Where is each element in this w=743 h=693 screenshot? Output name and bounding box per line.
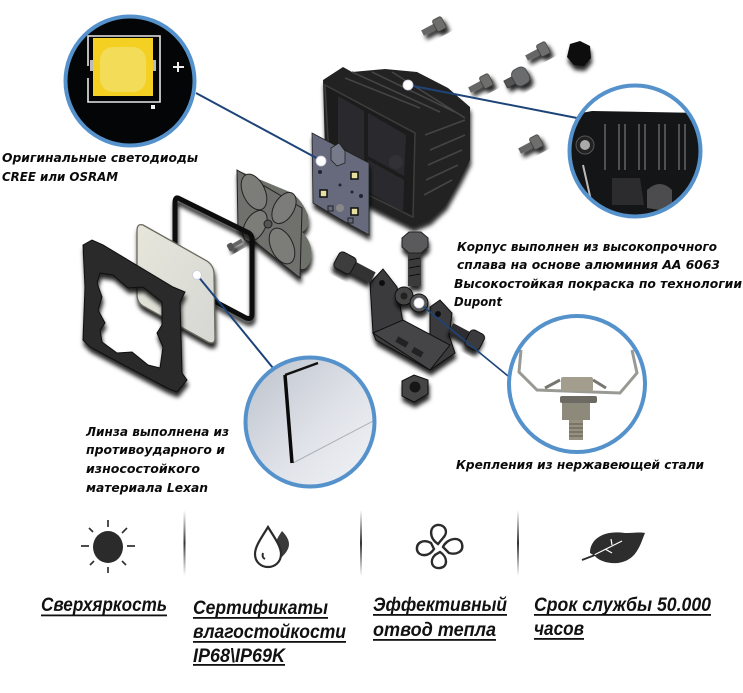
caption: housing: Dupont [454,295,503,309]
caption: fasteners: Крепления из нержавеющей стали [456,458,705,472]
benefit: certificates: Сертификаты [193,597,328,619]
black front frame [83,240,187,392]
caption: lens: износостойкого [86,462,200,476]
small screw on reflector [226,237,244,252]
housing: finned aluminium body [323,67,470,227]
caption: lens [85,425,229,495]
benefit: service life: часов [534,618,584,640]
caption: LEDs [2,151,198,184]
icon: fan [417,525,462,568]
caption: housing: Корпус выполнен из высокопрочного [457,240,717,254]
marker dots [192,80,424,308]
reflector plate with four lobes [236,170,311,278]
caption: lens: противоударного и [86,443,226,457]
clear lens panel [137,225,215,343]
caption: LEDs: Оригинальные светодиоды [2,151,198,165]
benefit: service life [534,594,711,640]
bracket washers [395,287,428,312]
benefit: brightness: Сверхяркость [41,594,167,616]
LED circuit board [312,133,369,235]
black gasket [175,198,252,318]
icon: water drops [255,527,289,567]
benefit: heat removal: Эффективный [373,594,507,616]
lock nut [402,375,428,402]
connector line: housing [408,85,577,118]
icon: leaf [582,532,645,563]
side bolt left of bracket [332,250,377,286]
mounting bracket [370,269,455,370]
black rubber plug [567,41,591,66]
caption: housing: Высокостойкая покраска по технологии [454,277,743,291]
hardware bolts at top [419,16,551,157]
benefit: heat removal [373,594,507,641]
magnifier: LED chip [60,10,200,150]
benefit: certificates: влагостойкости [193,621,346,643]
caption: lens: материала Lexan [86,481,208,495]
long vertical bolt [402,232,428,286]
connector line: lens [197,275,273,368]
benefit: heat removal: отвод тепла [373,619,496,641]
magnifier: lens edge [244,356,376,488]
benefit: service life: Срок службы 50.000 [534,594,711,616]
caption: lens: Линза выполнена из [85,425,229,439]
magnifier: housing detail [565,80,705,220]
side bolt right of bracket [447,320,486,352]
caption: housing [454,240,743,309]
icon: sun [81,520,135,573]
benefit: certificates: IP68\IP69K [193,645,287,667]
magnifier: stainless fastening [505,315,650,455]
caption: LEDs: CREE или OSRAM [2,170,118,184]
connector line: LED [196,93,322,161]
connector line: bracket [419,303,508,376]
caption: housing: сплава на основе алюминия АА 6063 [457,258,720,272]
benefit: certificates [193,597,346,667]
